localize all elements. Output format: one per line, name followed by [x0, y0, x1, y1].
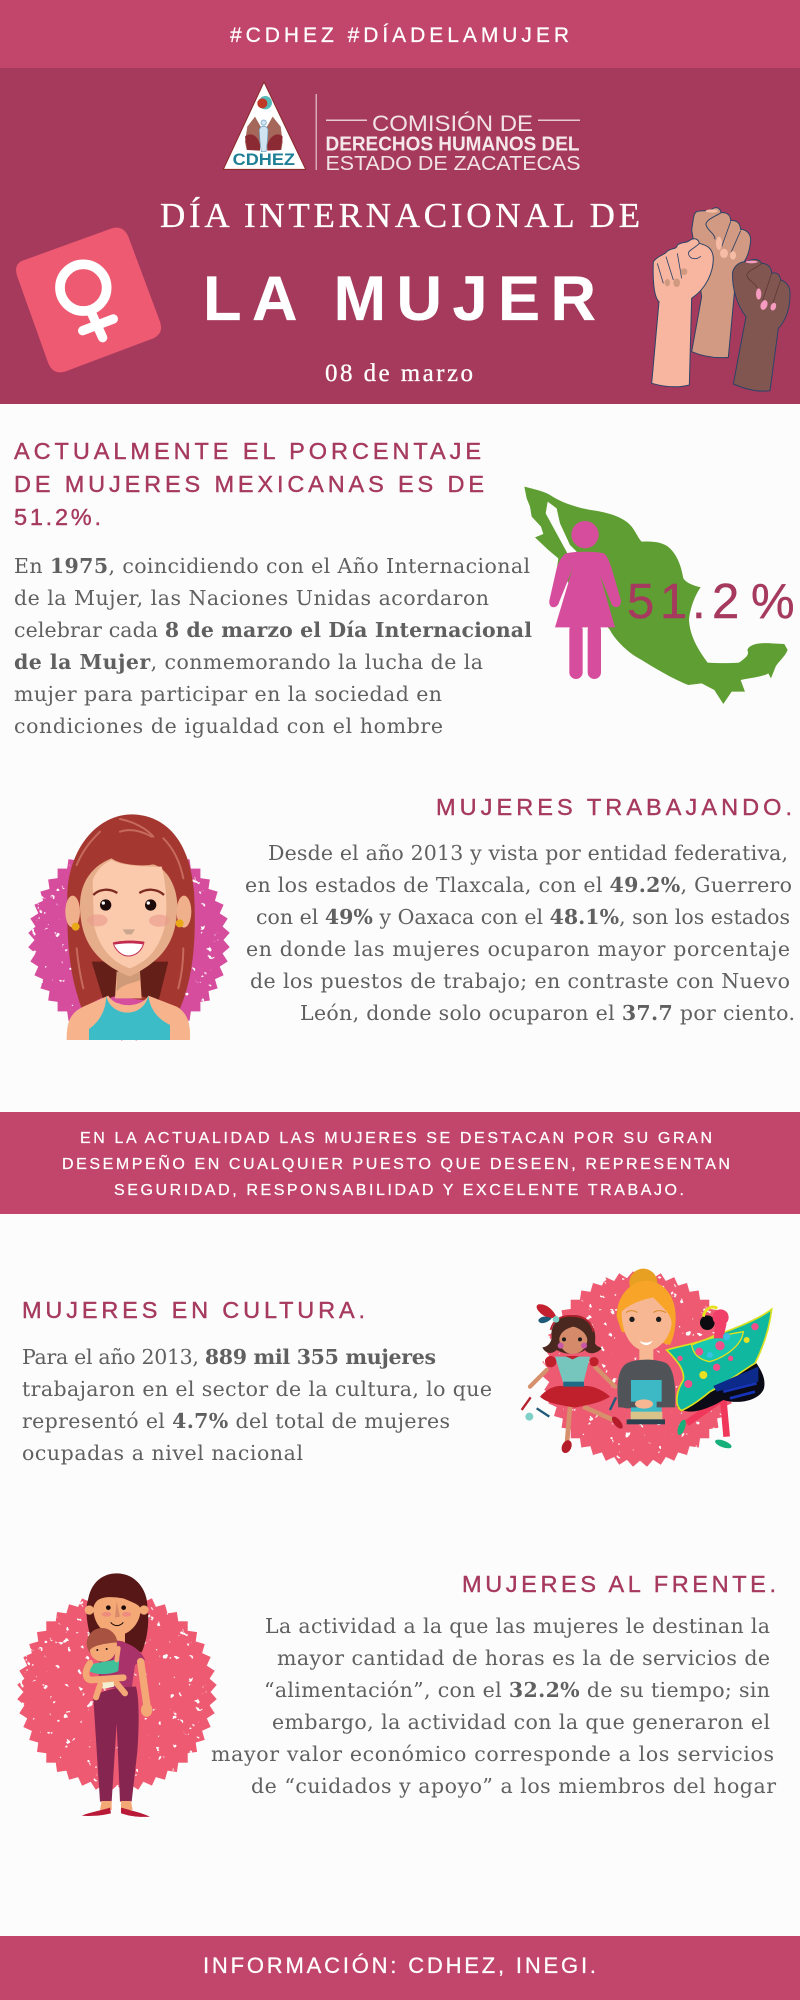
portrait — [65, 814, 195, 1040]
girl dancer — [522, 1304, 625, 1455]
logo: CDHEZ — [223, 82, 580, 175]
text block — [211, 1614, 776, 1798]
text block: de “cuidados y apoyo” a los miembros del hogar — [251, 1774, 776, 1798]
text block: León, donde solo ocuparon el 37.7 por ciento. — [300, 1001, 795, 1025]
text block: de los puestos de trabajo; en contraste con Nuevo — [250, 969, 790, 993]
heading: MUJERES TRABAJANDO. — [436, 794, 792, 820]
percentage label: 51.2% — [627, 575, 795, 629]
footer bar — [0, 1936, 800, 2000]
text block: mujer para participar en la sociedad en — [14, 682, 442, 706]
text block: En 1975, coincidiendo con el Año Internacional — [14, 554, 530, 578]
banner text: SEGURIDAD, RESPONSABILIDAD Y EXCELENTE TRABAJO. — [114, 1182, 684, 1199]
coral starburst — [17, 1592, 217, 1792]
heading — [14, 438, 484, 530]
text block: representó el 4.7% del total de mujeres — [22, 1409, 450, 1433]
heading: 51.2%. — [14, 504, 101, 530]
figures — [522, 1269, 772, 1455]
panel: porcentaje de mujeres — [14, 438, 795, 738]
logo wordmark — [316, 94, 580, 175]
heading: ACTUALMENTE EL PORCENTAJE — [14, 438, 481, 464]
illustration: mother and baby — [17, 1573, 217, 1817]
text block: “alimentación”, con el 32.2% de su tiempo; sin — [264, 1678, 770, 1702]
date: 08 de marzo — [325, 360, 473, 387]
text block: Para el año 2013, 889 mil 355 mujeres — [22, 1345, 436, 1369]
panel: mujeres trabajando — [28, 794, 795, 1041]
banner: mensaje — [0, 1112, 800, 1214]
title line 1: DÍA INTERNACIONAL DE — [160, 196, 640, 235]
light skin fist — [652, 239, 713, 387]
text block: trabajaron en el sector de la cultura, lo que — [22, 1377, 492, 1401]
illustration: woman portrait — [28, 814, 230, 1041]
text block — [14, 554, 532, 738]
banner text: DESEMPEÑO EN CUALQUIER PUESTO QUE DESEEN, REPRESENTAN — [62, 1153, 730, 1173]
logo wordmark: ESTADO DE ZACATECAS — [326, 153, 580, 175]
illustration: cultural figures — [522, 1269, 772, 1467]
logo wordmark: DERECHOS HUMANOS DEL — [326, 134, 580, 156]
text block: con el 49% y Oaxaca con el 48.1%, son los estados — [256, 905, 790, 929]
text block: mayor cantidad de horas es la de servicios de — [277, 1646, 770, 1670]
logo triangle emblem — [223, 82, 306, 169]
magenta starburst — [28, 839, 230, 1041]
banner text — [62, 1130, 730, 1199]
text block: en los estados de Tlaxcala, con el 49.2%, Guerrero — [245, 873, 792, 897]
header banner — [0, 68, 800, 404]
logo triangle emblem: CDHEZ — [233, 150, 295, 169]
logo wordmark: COMISIÓN DE — [372, 111, 533, 136]
text block: mayor valor económico corresponde a los servicios — [211, 1742, 774, 1766]
text block: Desde el año 2013 y vista por entidad federativa, — [268, 841, 788, 865]
top hashtag bar — [0, 0, 800, 68]
text block: La actividad a la que las mujeres le destinan la — [265, 1614, 770, 1638]
text block: celebrar cada 8 de marzo el Día Internacional — [14, 618, 532, 642]
heading: DE MUJERES MEXICANAS ES DE — [14, 471, 484, 497]
panel: mujeres al frente — [17, 1571, 776, 1817]
text block: ocupadas a nivel nacional — [22, 1441, 303, 1465]
baby — [86, 1628, 125, 1697]
map of Mexico with woman figure — [524, 487, 795, 704]
map — [524, 487, 788, 704]
woman figure — [549, 521, 621, 679]
text block: de la Mujer, las Naciones Unidas acordaron — [14, 586, 489, 610]
text block — [22, 1345, 492, 1465]
heading: MUJERES EN CULTURA. — [22, 1297, 365, 1323]
text block: embargo, la actividad con la que generaron el — [272, 1710, 770, 1734]
heading: MUJERES AL FRENTE. — [462, 1571, 776, 1597]
text block: de la Mujer, conmemorando la lucha de la — [14, 650, 483, 674]
dark skin fist — [733, 259, 790, 391]
hashtag text: #CDHEZ #DÍADELAMUJER — [230, 24, 569, 47]
folkloric dancer — [667, 1307, 772, 1450]
text block — [245, 841, 795, 1025]
text block: condiciones de igualdad con el hombre — [14, 714, 443, 738]
panel: mujeres en cultura — [22, 1269, 772, 1467]
medium skin fist — [692, 208, 751, 358]
footer source text: INFORMACIÓN: CDHEZ, INEGI. — [203, 1953, 596, 1978]
coral starburst — [542, 1271, 738, 1467]
title line 2: LA MUJER — [203, 264, 596, 334]
icon: raised fists — [652, 208, 790, 391]
banner text: EN LA ACTUALIDAD LAS MUJERES SE DESTACAN POR SU GRAN — [80, 1130, 712, 1147]
icon: female symbol — [16, 228, 161, 372]
teacher — [617, 1269, 676, 1424]
text block: en donde las mujeres ocuparon mayor porcentaje — [246, 937, 790, 961]
mother — [82, 1573, 152, 1817]
